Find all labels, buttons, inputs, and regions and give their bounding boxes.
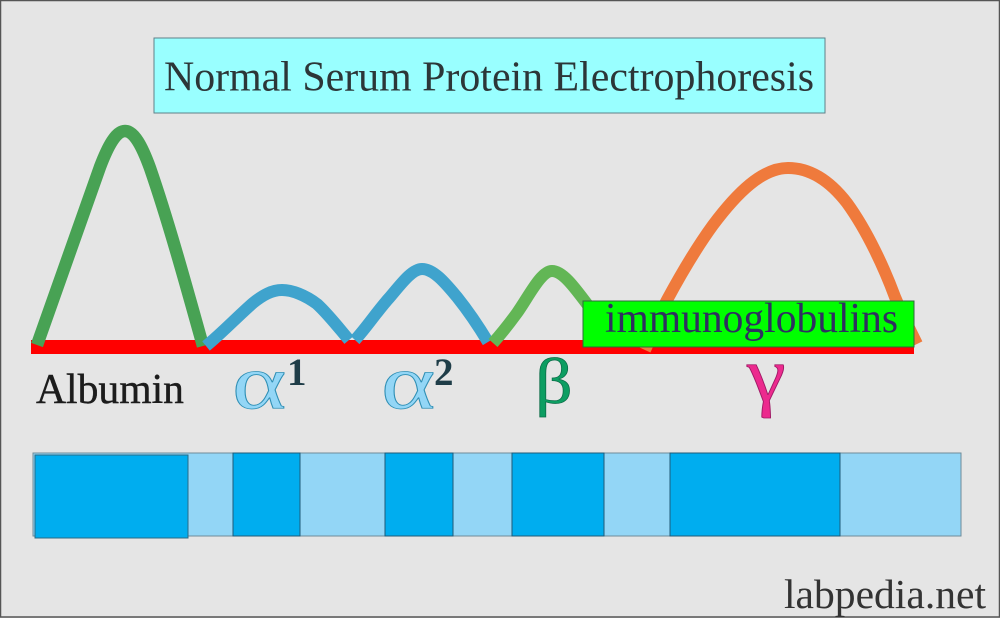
baseline bar — [31, 340, 914, 354]
watermark: labpedia.net — [784, 571, 987, 617]
alpha 1 peak — [206, 290, 349, 346]
alpha 1 band — [233, 453, 300, 536]
alpha 1 label: α — [232, 338, 286, 425]
albumin band — [35, 455, 188, 538]
alpha 2 label: 2 — [434, 351, 454, 394]
electrophoresis gel strip — [33, 453, 961, 538]
gamma peak — [645, 168, 917, 350]
alpha 2 peak — [355, 269, 488, 342]
title — [154, 38, 825, 113]
albumin label: Albumin — [36, 367, 184, 413]
beta label: β — [535, 346, 573, 418]
alpha 1 label: 1 — [287, 351, 306, 394]
gamma label: γ — [746, 330, 786, 419]
alpha 2 label: α — [381, 338, 435, 425]
immunoglobulins label: immunoglobulins — [605, 296, 898, 342]
beta peak — [493, 271, 590, 343]
gamma band — [670, 453, 840, 536]
beta band — [512, 453, 604, 536]
alpha 2 band — [385, 453, 453, 536]
albumin peak — [37, 131, 203, 346]
title: Normal Serum Protein Electrophoresis — [164, 54, 814, 100]
